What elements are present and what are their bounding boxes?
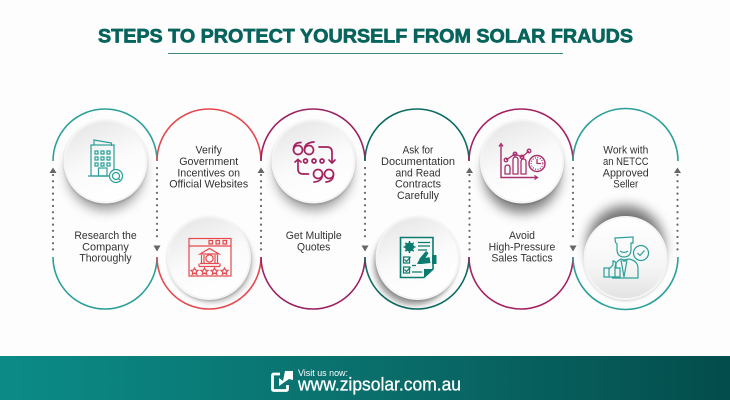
icon: seller with thumbs up: [604, 237, 648, 278]
panel: verify government incentives: [157, 109, 261, 309]
step text: Incentives on: [177, 168, 240, 180]
icon: contract document: [400, 238, 436, 278]
step text: [489, 230, 555, 264]
step text: Documentation: [381, 156, 455, 168]
pill outline: red: [157, 109, 261, 309]
pill outline: teal: [53, 109, 157, 309]
arrow: down, between steps 1 and 2: [154, 168, 160, 252]
circle shadow: [484, 137, 560, 213]
step text: Thoroughly: [79, 252, 132, 264]
pill outline: magenta: [469, 109, 573, 309]
pill outline: dark teal: [365, 109, 469, 309]
circle badge: [64, 120, 146, 202]
circle shadow: [68, 134, 144, 210]
panel: ask for documentation: [365, 109, 469, 309]
arrow: up, far right: [674, 168, 681, 251]
pill outline: magenta: [261, 109, 365, 309]
step text: Contracts: [395, 178, 442, 190]
footer call to action: www.zipsolar.com.au: [297, 374, 461, 394]
circle badge: [272, 120, 354, 202]
step text: Research the: [74, 230, 137, 242]
circle badge: [481, 120, 563, 202]
step text: Get Multiple: [286, 230, 342, 242]
step text: High-Pressure: [489, 242, 555, 254]
step text: [381, 144, 455, 202]
circle shadow: [374, 225, 454, 305]
footer call to action: Visit us now:: [298, 368, 348, 379]
step text: Approved: [603, 168, 649, 180]
icon: website with bank and stars: [189, 238, 231, 276]
icon: bar chart with clock: [499, 144, 545, 180]
step text: Sales Tactics: [491, 252, 553, 264]
step text: Verify: [196, 144, 222, 156]
step text: and Read: [396, 168, 440, 180]
icon: external link: [272, 371, 293, 390]
step text: Seller: [613, 178, 639, 190]
circle badge: [376, 217, 458, 299]
step text: Government: [179, 156, 238, 168]
icon: quotes with arrows: [294, 142, 335, 182]
step text: [603, 144, 649, 190]
panel: avoid high-pressure sales tactics: [469, 109, 573, 309]
step text: [286, 230, 342, 254]
step text: Carefully: [397, 190, 440, 202]
circle shadow: [276, 134, 352, 210]
step text: Official Websites: [169, 178, 249, 190]
icon: office building with magnifier: [88, 140, 122, 182]
arrow: down, between steps 3 and 4: [362, 168, 368, 252]
step text: [169, 144, 249, 190]
step text: Quotes: [297, 242, 331, 254]
arrow: up, between steps 2 and 3: [258, 168, 264, 251]
step text: [74, 230, 137, 264]
circle shadow: [172, 222, 252, 302]
arrow: up, between steps 4 and 5: [466, 168, 473, 251]
title: STEPS TO PROTECT YOURSELF FROM SOLAR FRAUDS: [98, 26, 633, 48]
circle shadow: [588, 206, 664, 282]
pill outline: teal: [573, 109, 678, 310]
step text: an NETCC: [603, 156, 649, 168]
panel: get multiple quotes: [261, 109, 365, 309]
step text: Company: [82, 242, 129, 254]
panel: NETCC approved seller: [573, 109, 678, 310]
circle badge: [168, 217, 250, 299]
step text: Ask for: [403, 144, 434, 156]
arrow: down, between steps 5 and 6: [570, 168, 576, 252]
arrow: up, far left: [50, 168, 56, 251]
title underline: [168, 53, 563, 54]
circle badge: [584, 217, 666, 299]
panel: research the company: [53, 109, 157, 309]
step text: Work with: [603, 144, 648, 156]
footer band: [0, 356, 730, 400]
step text: Avoid: [509, 230, 535, 242]
